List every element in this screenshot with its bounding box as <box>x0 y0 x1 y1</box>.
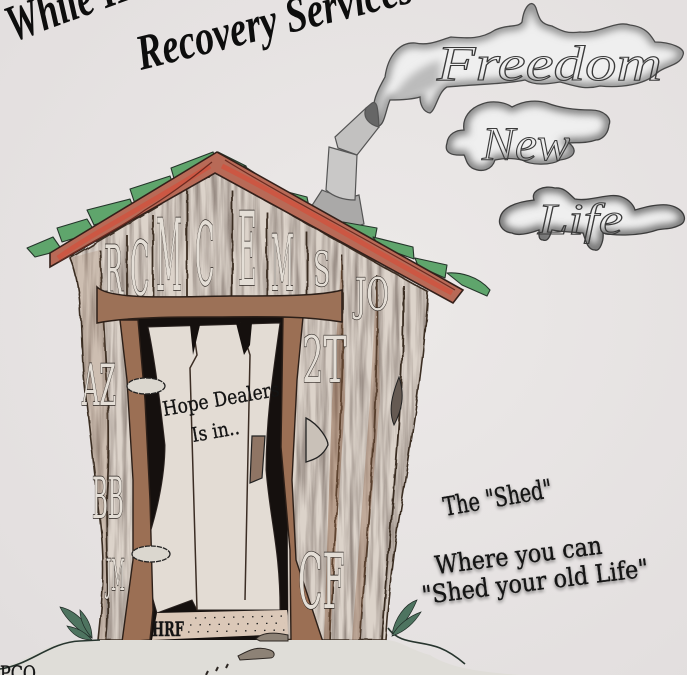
carved initials on lower wall: JM <box>105 549 125 601</box>
carved initials on lower wall: AZ <box>81 353 116 419</box>
carved initials on lower wall <box>81 323 346 626</box>
sign: Hope Dealers Is in <box>161 377 281 447</box>
carved initials on lower wall: 2T <box>302 323 346 398</box>
door <box>130 315 288 641</box>
carved initials on upper planks: S <box>313 242 330 298</box>
wood tint on log sides <box>70 250 108 640</box>
caption line: The Shed: The "Shed" <box>441 474 555 523</box>
wood knot <box>391 377 402 425</box>
carved initials on upper planks: C <box>130 227 150 314</box>
carved initials on upper planks: C <box>195 206 215 307</box>
title <box>0 0 417 81</box>
carved initials on upper planks: M <box>156 200 182 315</box>
chimney <box>311 103 379 232</box>
word: Freedom: Freedom <box>436 35 662 91</box>
caption line: Shed your old Life: "Shed your old Life" <box>420 553 650 610</box>
green roof shingles <box>27 152 490 296</box>
hinge top <box>127 378 165 394</box>
stones and footpath <box>206 633 288 675</box>
carved initials on lower wall: CF <box>298 538 345 626</box>
lintel log <box>97 287 342 323</box>
wood grain texture <box>71 174 428 640</box>
word: Life: Life <box>537 195 623 244</box>
caption: The Shed <box>420 474 650 610</box>
carved initials on upper planks: R <box>104 233 124 312</box>
door frame posts <box>120 317 323 642</box>
red roof band <box>50 152 463 303</box>
hinge bottom <box>132 546 170 562</box>
sign: Hope Dealers Is in: Is in.. <box>190 415 241 447</box>
carved initials on upper planks <box>104 190 389 321</box>
sign: Hope Dealers Is in: Hope Dealers <box>161 377 281 421</box>
carved initials on upper planks: JO <box>352 268 389 321</box>
plank seams <box>100 190 403 640</box>
caption line: Where you can: Where you can <box>433 531 603 580</box>
door opening <box>130 315 288 640</box>
smoke cloud: New <box>446 101 610 171</box>
grass right <box>392 600 421 636</box>
smoke cloud: Freedom <box>373 4 683 127</box>
carved initials on upper planks: E <box>238 190 257 310</box>
shed wall <box>60 160 440 650</box>
hill ground <box>0 628 520 675</box>
carved initials on lower wall: BB <box>92 466 124 533</box>
door sand threshold <box>152 610 288 640</box>
door threshold mark HRF: HRF <box>152 618 184 641</box>
door handle <box>250 436 265 483</box>
word: New: New <box>481 118 570 171</box>
carved initials on upper planks: M <box>271 218 294 309</box>
door planks <box>146 323 280 613</box>
wood knot eye <box>306 418 328 462</box>
grass left <box>60 607 92 640</box>
smoke cloud: Life <box>500 187 684 250</box>
